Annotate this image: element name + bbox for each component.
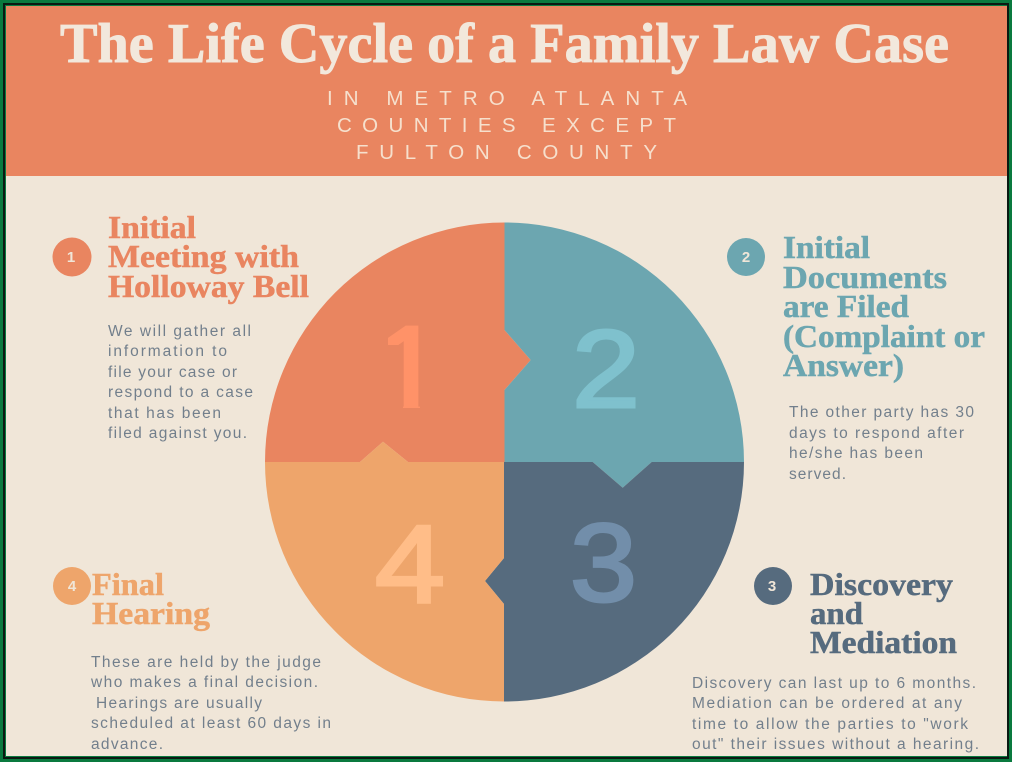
step 2 block	[727, 229, 985, 483]
badge 2	[727, 238, 765, 276]
body 3: out" their issues without a hearing.	[692, 736, 979, 753]
header banner	[6, 6, 1007, 176]
body 1: information to	[108, 343, 227, 360]
step 1 block	[52, 209, 309, 442]
cycle pie chart	[265, 222, 744, 702]
badge 2: 2	[742, 249, 750, 266]
segment 1	[265, 222, 531, 462]
step 4 block	[53, 566, 331, 753]
badge 1: 1	[67, 249, 75, 266]
body 3: time to allow the parties to "work	[692, 716, 968, 733]
heading 2: Answer)	[783, 347, 904, 383]
numeral 2: 2	[572, 308, 640, 431]
body 1: that has been	[108, 405, 221, 422]
body 2: The other party has 30	[789, 404, 974, 421]
badge 3: 3	[768, 578, 776, 595]
badge 4	[53, 567, 91, 605]
heading 4: Final	[92, 566, 164, 602]
body 2: served.	[789, 466, 846, 483]
subtitle: FULTON COUNTY	[356, 141, 657, 164]
body 1	[108, 323, 253, 442]
body 2: he/she has been	[789, 445, 923, 462]
heading 2: Documents	[783, 259, 947, 295]
body 2: days to respond after	[789, 425, 964, 442]
badge 4: 4	[68, 578, 77, 595]
heading 2: are Filed	[783, 288, 909, 324]
heading 2	[783, 229, 985, 383]
heading 4	[92, 566, 210, 631]
segment 4	[265, 442, 504, 702]
title: The Life Cycle of a Family Law Case	[60, 13, 949, 75]
body 1: filed against you.	[108, 425, 247, 442]
heading 3	[810, 566, 957, 660]
segment 2	[504, 222, 744, 488]
segment 3	[485, 462, 744, 702]
body 3	[692, 675, 979, 753]
heading 2: Initial	[783, 229, 870, 265]
body 4: who makes a final decision.	[90, 674, 318, 691]
heading 1: Meeting with	[108, 238, 299, 274]
body 1: We will gather all	[108, 323, 251, 340]
badge 1	[52, 238, 92, 276]
numeral 4: 4	[375, 503, 445, 626]
heading 3: Discovery	[810, 566, 953, 602]
body 4: Hearings are usually	[96, 695, 262, 712]
heading 2: (Complaint or	[783, 318, 985, 354]
body 3: Discovery can last up to 6 months.	[692, 675, 976, 692]
heading 3: Mediation	[810, 624, 957, 660]
heading 1: Initial	[108, 209, 196, 245]
subtitle: COUNTIES EXCEPT	[337, 114, 676, 137]
numeral 1: 1	[372, 299, 445, 446]
body 1: file your case or	[108, 364, 237, 381]
body 4: advance.	[91, 736, 163, 753]
heading 1: Holloway Bell	[108, 268, 309, 304]
subtitle: IN METRO ATLANTA	[327, 87, 687, 110]
body 4: These are held by the judge	[91, 654, 321, 671]
body 3: Mediation can be ordered at any	[692, 695, 962, 712]
heading 4: Hearing	[92, 595, 210, 631]
subtitle	[327, 87, 687, 164]
body 1: respond to a case	[108, 384, 253, 401]
numeral 3: 3	[570, 502, 637, 625]
heading 1	[108, 209, 309, 304]
step 3 block	[692, 566, 979, 753]
body 4: scheduled at least 60 days in	[91, 715, 331, 732]
body 4	[90, 654, 331, 753]
heading 3: and	[810, 595, 863, 631]
badge 3	[754, 567, 792, 605]
body 2	[789, 404, 974, 483]
